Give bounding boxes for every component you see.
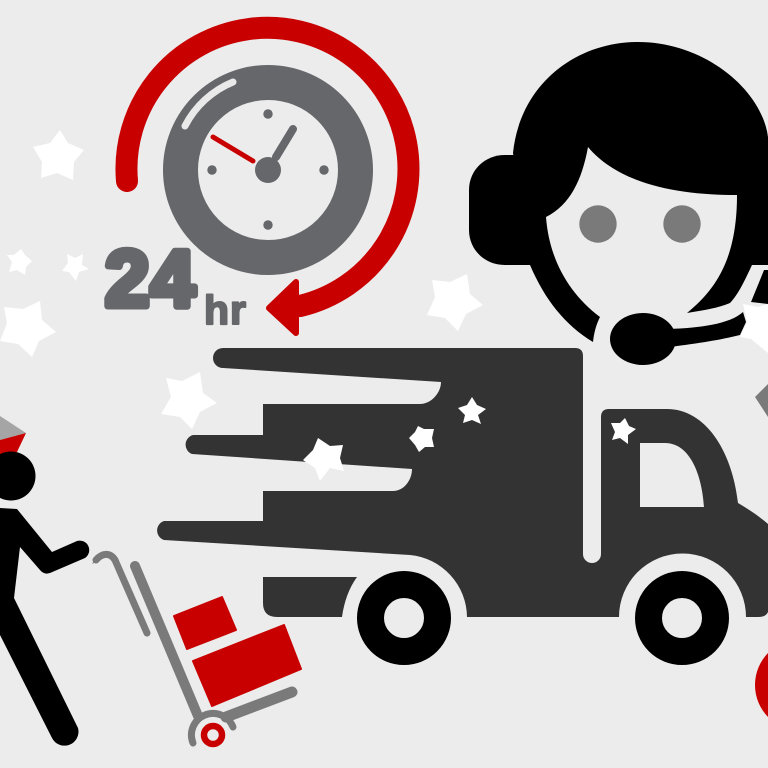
icon: hand truck with boxes [92, 553, 301, 744]
stars [0, 130, 768, 481]
large box [193, 625, 301, 706]
clock face [180, 82, 356, 258]
lower right hair [751, 270, 768, 304]
hat [0, 416, 26, 460]
partial grey shape at right edge [755, 384, 768, 417]
truck rear lower panel [263, 577, 357, 617]
truck body with speed lines [157, 348, 768, 617]
head [0, 452, 36, 500]
cart wheel [204, 726, 222, 744]
front wheel [648, 584, 716, 652]
icon: support agent with headset [469, 42, 768, 365]
eyes [579, 205, 701, 243]
icon: delivery person [0, 416, 89, 746]
text: 24: 24 [105, 234, 196, 323]
red circular arrow [126, 28, 408, 333]
hair and face outline [513, 42, 768, 342]
ear cup [469, 155, 544, 265]
icon: 24 hour clock [105, 28, 408, 333]
icon: delivery truck [157, 348, 768, 652]
small box [174, 597, 236, 649]
cart frame [96, 554, 292, 743]
body and leg [0, 508, 89, 746]
partial red circle at right edge [755, 639, 768, 731]
microphone [610, 312, 746, 365]
text: hr: hr [204, 287, 246, 333]
rear wheel [370, 584, 438, 652]
